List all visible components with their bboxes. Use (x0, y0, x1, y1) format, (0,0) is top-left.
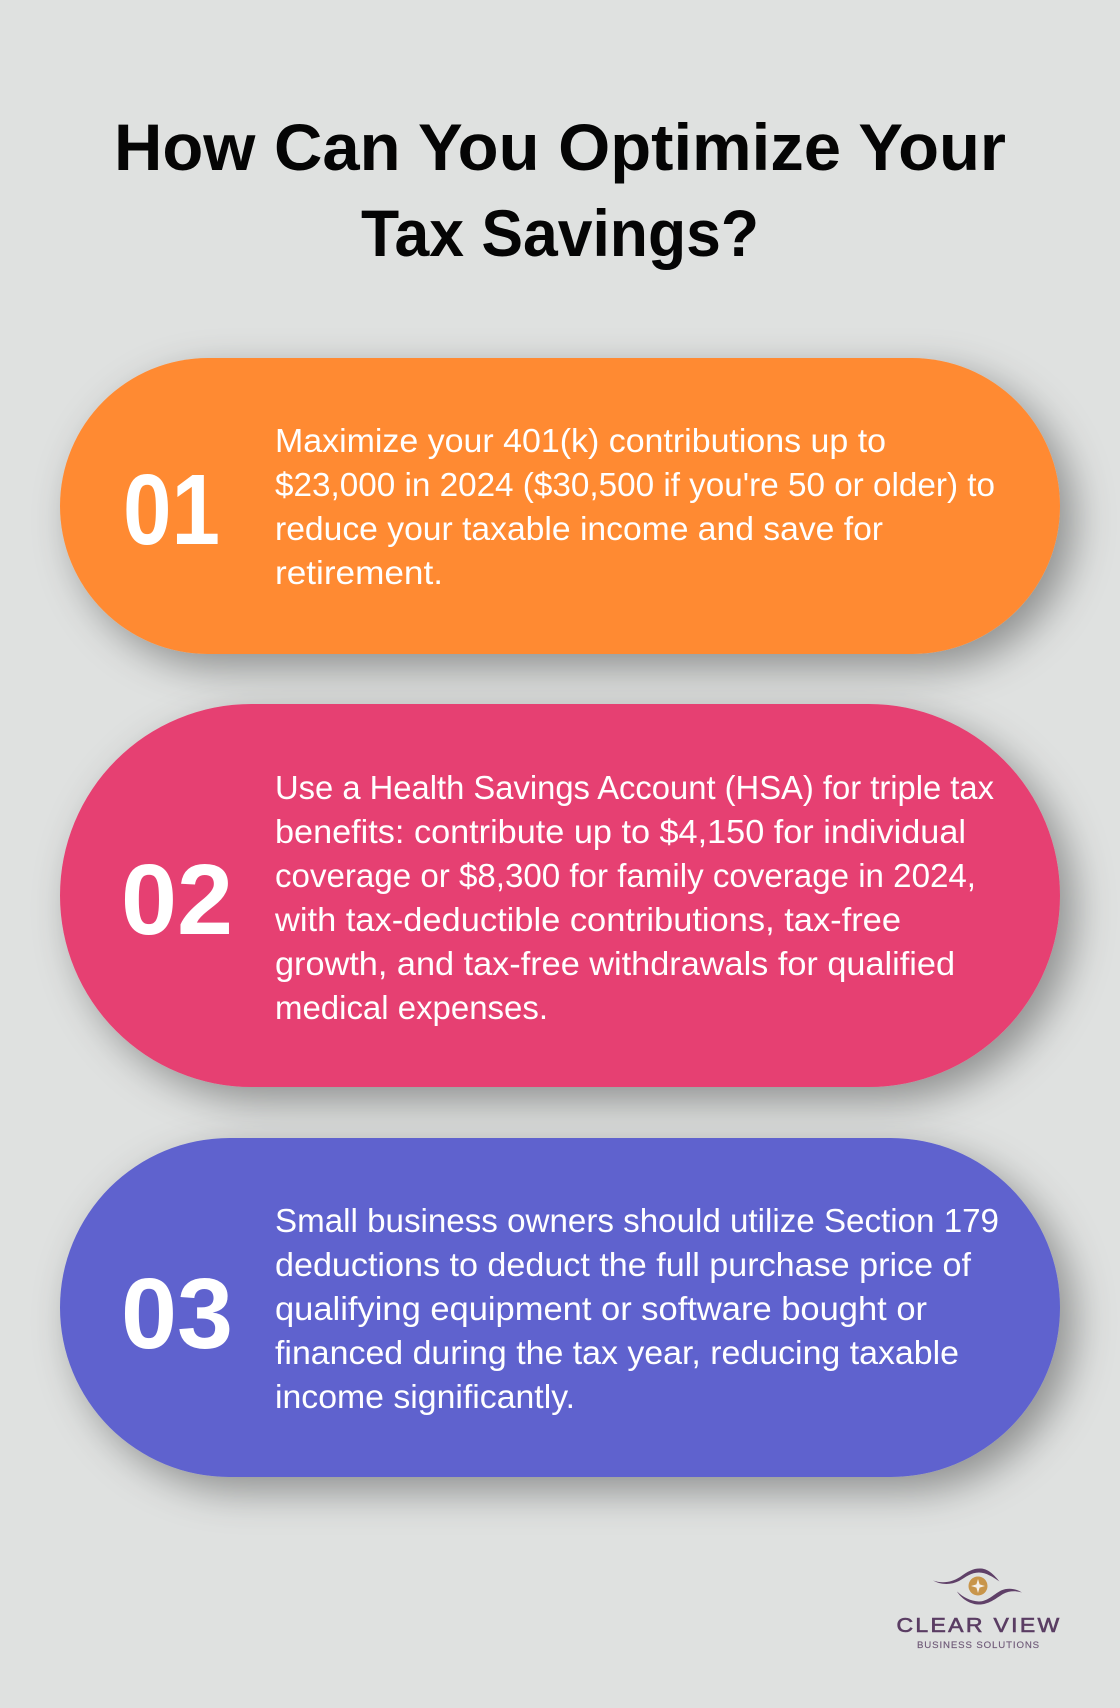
panel: step 01 401(k) contributions (60, 358, 1060, 654)
text block: HSA advice: benefits: contribute up to $4,150 for individual (275, 813, 966, 850)
text block: 401(k) advice (275, 422, 995, 591)
title: Tax Savings? (361, 196, 759, 270)
logo wordmark: CLEAR VIEW (896, 1615, 1062, 1637)
pill background orange (60, 358, 1060, 654)
pill background pink (60, 704, 1060, 1087)
pill background blue (60, 1138, 1060, 1477)
text block: HSA advice (274, 769, 994, 1026)
text block: Section 179 advice: financed during the tax year, reducing taxable (275, 1334, 959, 1371)
text block: HSA advice: Use a Health Savings Account (HSA) for triple tax (275, 769, 994, 806)
title: How Can You Optimize Your (114, 110, 1006, 184)
text block: 401(k) advice: $23,000 in 2024 ($30,500 if you're 50 or older) to (275, 466, 995, 503)
text block: HSA advice: growth, and tax-free withdrawals for qualified (275, 945, 955, 982)
panel: step 02 health savings account (60, 704, 1060, 1087)
title (114, 110, 1006, 270)
text block: HSA advice: with tax-deductible contributions, tax-free (274, 901, 901, 938)
text block: Section 179 advice: income significantly. (275, 1378, 575, 1415)
text block: Section 179 advice: qualifying equipment or software bought or (275, 1290, 927, 1327)
text block: 401(k) advice: reduce your taxable income and save for (275, 510, 883, 547)
icon: eye mark (933, 1568, 1022, 1605)
number 03: 03 (121, 1258, 233, 1370)
text block: 401(k) advice: Maximize your 401(k) contributions up to (275, 422, 886, 459)
text block: Section 179 advice: deductions to deduct the full purchase price of (275, 1246, 972, 1283)
panel: step 03 section 179 (60, 1138, 1060, 1477)
logo: Clear View Business Solutions (896, 1568, 1062, 1650)
text block: HSA advice: medical expenses. (275, 989, 548, 1026)
number 01: 01 (123, 454, 220, 566)
text block: Section 179 advice: Small business owners should utilize Section 179 (275, 1202, 999, 1239)
text block: 401(k) advice: retirement. (275, 554, 443, 591)
number 02: 02 (121, 844, 233, 956)
text block: Section 179 advice (275, 1202, 999, 1415)
text block: HSA advice: coverage or $8,300 for family coverage in 2024, (275, 857, 976, 894)
logo tagline: BUSINESS SOLUTIONS (917, 1640, 1040, 1650)
